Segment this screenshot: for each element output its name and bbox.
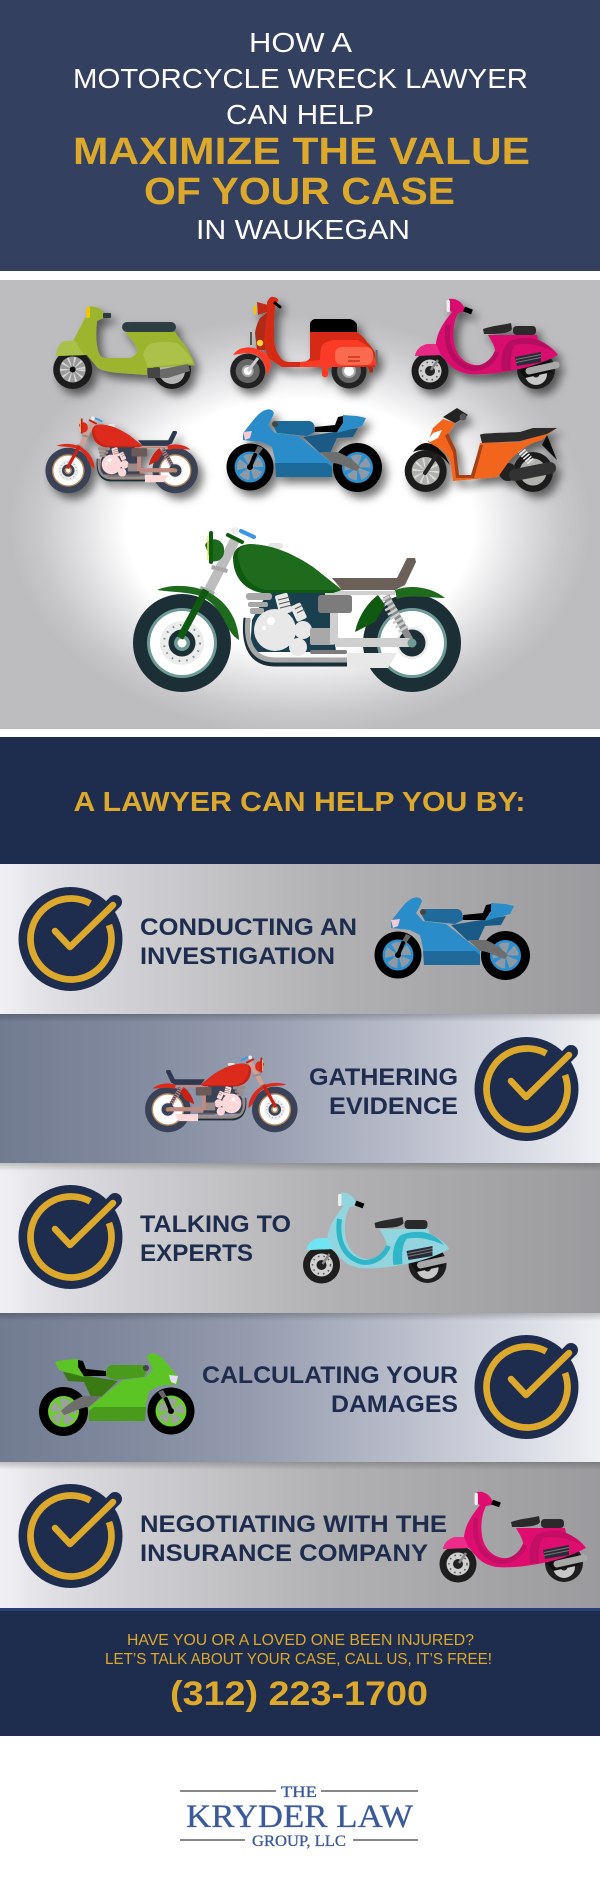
- text: talking to experts: TALKING TO: [140, 1211, 291, 1238]
- title text: [73, 27, 530, 245]
- icon: red retro motorcycle: [145, 1056, 298, 1132]
- icon: check badge: [18, 1185, 122, 1289]
- text: calculating your damages: [202, 1362, 458, 1418]
- text: conducting an investigation: CONDUCTING AN: [140, 914, 357, 941]
- icon: green sport motorcycle: [39, 1353, 194, 1436]
- logo: The Kryder Law Group, LLC: THE: [281, 1784, 317, 1801]
- text: talking to experts: EXPERTS: [140, 1240, 253, 1267]
- logo: The Kryder Law Group, LLC: GROUP, LLC: [252, 1833, 346, 1850]
- phone number: (312) 223-1700: [170, 1675, 428, 1713]
- title text: HOW A: [249, 27, 353, 58]
- logo: The Kryder Law Group, LLC: KRYDER LAW: [186, 1799, 414, 1835]
- text: calculating your damages: DAMAGES: [331, 1391, 458, 1418]
- title text: IN WAUKEGAN: [196, 214, 410, 245]
- icon: red retro motorcycle: [45, 417, 198, 493]
- title text: MAXIMIZE THE VALUE: [73, 131, 530, 173]
- icon: red scooter: [230, 297, 378, 388]
- text: gathering evidence: EVIDENCE: [329, 1093, 458, 1120]
- icon: check badge: [474, 1037, 578, 1141]
- panel: gathering evidence: [0, 1014, 600, 1163]
- icon: teal scooter: [303, 1193, 450, 1284]
- text: negotiating with the insurance company: INSURANCE COMPANY: [140, 1540, 428, 1567]
- icon: blue sport motorcycle: [226, 409, 382, 492]
- panel: calculating your damages: [0, 1313, 600, 1462]
- text: gathering evidence: GATHERING: [309, 1064, 458, 1091]
- icon: pink scooter: [440, 1492, 586, 1582]
- icon: lime scooter: [53, 306, 195, 389]
- icon: check badge: [474, 1335, 578, 1439]
- icon: green retro motorcycle: [133, 527, 461, 692]
- title text: OF YOUR CASE: [144, 171, 455, 213]
- icon: pink scooter: [412, 299, 558, 390]
- heading: A LAWYER CAN HELP YOU BY:: [74, 786, 526, 817]
- text: negotiating with the insurance company: NEGOTIATING WITH THE: [140, 1511, 447, 1538]
- icon: blue sport motorcycle: [374, 897, 530, 980]
- icon: check badge: [18, 1484, 122, 1588]
- panel: motorcycles showcase: [0, 280, 600, 729]
- title text: CAN HELP: [226, 99, 374, 130]
- panel: section heading: [0, 737, 600, 864]
- panel: talking to experts: [0, 1163, 600, 1313]
- icon: check badge: [18, 887, 122, 991]
- text: conducting an investigation: [140, 914, 357, 970]
- panel: call to action: [0, 1608, 600, 1736]
- call to action text: LET’S TALK ABOUT YOUR CASE, CALL US, IT’S FREE!: [105, 1651, 492, 1668]
- text: calculating your damages: CALCULATING YOUR: [202, 1362, 458, 1389]
- call to action text: [105, 1632, 492, 1668]
- panel: conducting an investigation: [0, 864, 600, 1014]
- text: conducting an investigation: INVESTIGATION: [140, 943, 335, 970]
- icon: orange scooter: [405, 408, 557, 492]
- text: negotiating with the insurance company: [140, 1511, 447, 1567]
- text: gathering evidence: [309, 1064, 458, 1120]
- logo: The Kryder Law Group, LLC: [180, 1784, 418, 1850]
- text: talking to experts: [140, 1211, 291, 1267]
- panel: negotiating with the insurance company: [0, 1462, 600, 1608]
- title text: MOTORCYCLE WRECK LAWYER: [73, 63, 528, 94]
- call to action text: HAVE YOU OR A LOVED ONE BEEN INJURED?: [127, 1632, 474, 1649]
- title panel: [0, 0, 600, 271]
